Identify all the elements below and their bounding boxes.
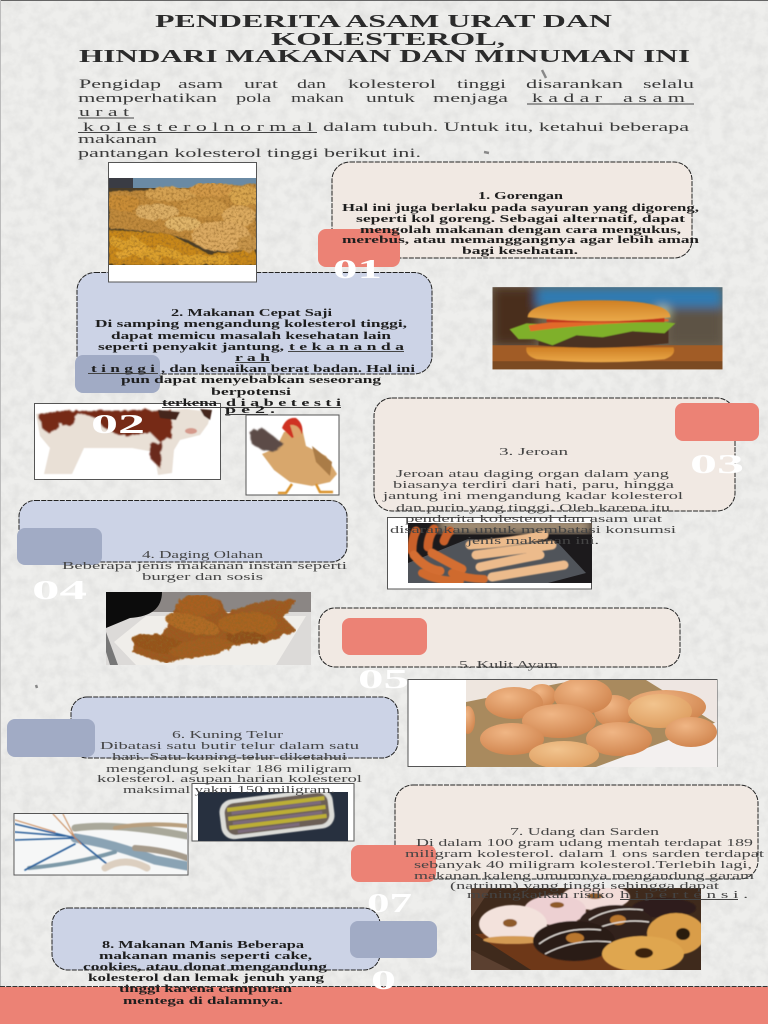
text: jeroan: biasanya terdiri dari hati, paru, hingga [393,480,675,491]
intro paragraph: k a d a r [532,91,603,105]
intro paragraph: k o l e s t e r o l n o r m a l [83,120,314,134]
panel 2 background: fast food [77,272,432,374]
text: jeroan: jenis makanan ini. [465,536,599,547]
text: gorengan: 1. Gorengan [478,191,563,202]
tag 02 [75,355,160,393]
tag 05 [342,618,427,655]
intro paragraph: u r a t [79,105,130,119]
text: gorengan: bagi kesehatan. [462,246,579,257]
panel 8: makanan manis: tinggi karena campuran [119,984,292,995]
panel 2 text: makanan cepat saji: Di samping mengandung kolesterol tinggi, [95,319,408,330]
panel 5: kulit ayam [319,608,680,671]
text: udang dan sarden: sebanyak 40 miligram kolesterol.Terlebih lagi, [414,860,752,871]
text: jeroan: 3. Jeroan [499,447,569,458]
text: jeroan: jantung ini mengandung kadar kolesterol [381,491,683,502]
image: donuts [471,888,701,970]
panel 2 text: makanan cepat saji: 2. Makanan Cepat Saji [171,308,332,319]
image: burger [492,287,722,370]
intro paragraph: tinggi [457,77,507,91]
text: jeroan [381,447,683,547]
text: udang dan sarden: makanan kaleng umumnya mengandung garam [414,871,754,882]
panel 2 text: makanan cepat saji: dapat memicu masalah kesehatan lain [111,331,391,342]
tag 03 [675,403,759,441]
panel 2 text: makanan cepat saji: pun dapat menyebabkan seseorang [121,375,382,386]
text: udang dan sarden [405,827,764,901]
text: gorengan: Hal ini juga berlaku pada sayuran yang digoreng, [342,203,700,214]
text: gorengan [342,191,700,257]
number 07: 07 [367,888,412,918]
panel 2 text: makanan cepat saji: d i a b e t e s t i [226,398,341,409]
panel 8: makanan manis: makanan manis seperti cake, [99,951,313,962]
text: udang dan sarden: miligram kolesterol. dalam 1 ons sarden terdapat [405,849,764,860]
intro paragraph: memperhatikan [78,91,218,105]
text: udang dan sarden: Di dalam 100 gram udang mentah terdapat 189 [416,838,753,849]
intro paragraph: a s a m [623,91,685,105]
text: kuning telur [97,730,362,796]
text: udang dan sarden: 7. Udang dan Sarden [510,827,660,838]
panel 3: jeroan [374,398,759,511]
number 08: 0 [371,965,396,995]
title [79,11,690,66]
image: sausages [388,518,592,589]
intro paragraph: makan [291,91,345,105]
text: jeroan: disarankan untuk membatasi konsumsi [390,525,676,536]
image: sardines [192,784,354,841]
tag 08 [350,921,437,958]
intro paragraph: kolesterol [348,77,437,91]
tag 07 [351,845,436,882]
intro paragraph: Pengidap [79,77,161,91]
image: shrimp [14,814,188,875]
image: chicken [246,415,339,495]
panel 2 text: makanan cepat saji: t e k a n a n d a [289,342,405,353]
panel 8: makanan manis: 8. Makanan Manis Beberapa [102,940,305,951]
bottom coral band [0,986,768,1024]
text: kuning telur: mengandung sekitar 186 miligram [106,764,352,775]
image: fried food [106,162,261,282]
panel 2 text: makanan cepat saji: terkena [162,398,218,409]
panel 2 text: makanan cepat saji: p e 2 . [225,405,276,416]
panel 2 text: makanan cepat saji [75,308,415,416]
number 04: 04 [32,575,87,605]
intro paragraph: selalu [643,77,695,91]
intro paragraph: menjaga [433,91,509,105]
intro paragraph: untuk [366,91,416,105]
intro paragraph: pola [236,91,272,105]
panel 2 text: makanan cepat saji: , dan kenaikan berat badan. Hal ini [161,364,415,375]
intro paragraph: makanan [78,132,158,146]
number 01: 01 [333,254,382,284]
title: HINDARI MAKANAN DAN MINUMAN INI [79,46,690,66]
panel 2 text: makanan cepat saji: seperti penyakit jantung, [98,342,285,353]
panel 6: kuning telur [7,697,398,758]
number 02: 02 [91,409,145,439]
text: gorengan: seperti kol goreng. Sebagai alternatif, dapat [356,214,686,225]
text: kuning telur: hari. Satu kuning telur diketahui [112,752,347,763]
panel 7: udang dan sarden [351,785,758,882]
text: kuning telur: kolesterol. asupan harian kolesterol [97,774,362,785]
panel 2 text: makanan cepat saji: berpotensi [211,387,291,398]
text: gorengan: merebus, atau memanggangnya agar lebih aman [342,235,699,246]
panel 4: daging olahan [17,500,347,583]
title: PENDERITA ASAM URAT DAN [155,11,613,31]
intro paragraph: dalam tubuh. Untuk itu, ketahui beberapa [323,120,690,134]
panel 1: gorengan [318,162,692,267]
text: kuning telur: 6. Kuning Telur [172,730,284,741]
panel 2 text: makanan cepat saji: t i n g g i [91,364,155,375]
panel 4: daging olahan: 4. Daging Olahan [142,550,264,561]
image: fried chicken [106,592,311,665]
intro paragraph [78,77,695,160]
text: kuning telur: Dibatasi satu butir telur dalam satu [100,741,360,752]
text: gorengan: mengolah makanan dengan cara mengukus, [360,225,682,236]
panel 8: makanan manis: kolesterol dan lemak jenuh yang [88,973,325,984]
panel 2 text: makanan cepat saji: r a h [235,353,270,364]
image: eggs [408,678,717,769]
number 03: 03 [690,449,744,479]
intro paragraph: urat [244,77,279,91]
panel 5: kulit ayam: 5. Kulit Ayam [459,660,558,671]
panel 8: makanan manis [52,908,437,1007]
intro paragraph: dan [297,77,327,91]
text: udang dan sarden: h i p e r t e n s i . [620,890,748,901]
image: cow [34,404,220,480]
text: jeroan: dan purin yang tinggi. Oleh karena itu [396,503,671,514]
panel 8: makanan manis: cookies, atau donat mengandung [83,962,328,973]
intro paragraph: asam [178,77,223,91]
title: KOLESTEROL, [271,29,505,49]
text: kuning telur: maksimal yakni 150 miligram. [123,785,335,796]
tag 06 [7,719,95,757]
coral tag 01 [318,229,400,267]
text: jeroan: penderita kolesterol dan asam urat [405,514,662,525]
panel 4: daging olahan: burger dan sosis [142,572,263,583]
tag 04 [17,528,102,565]
number 05: 05 [358,664,409,694]
text: udang dan sarden: meningkatkan risiko [467,890,614,901]
text: udang dan sarden: (natrium) yang tinggi sehingga dapat [450,881,719,892]
intro paragraph: pantangan kolesterol tinggi berikut ini. [78,146,421,160]
panel 8: makanan manis: mentega di dalamnya. [123,996,284,1007]
panel 4: daging olahan: Beberapa jenis makanan instan seperti [62,561,347,572]
text: jeroan: Jeroan atau daging organ dalam yang [396,469,670,480]
intro paragraph: disarankan [526,77,624,91]
